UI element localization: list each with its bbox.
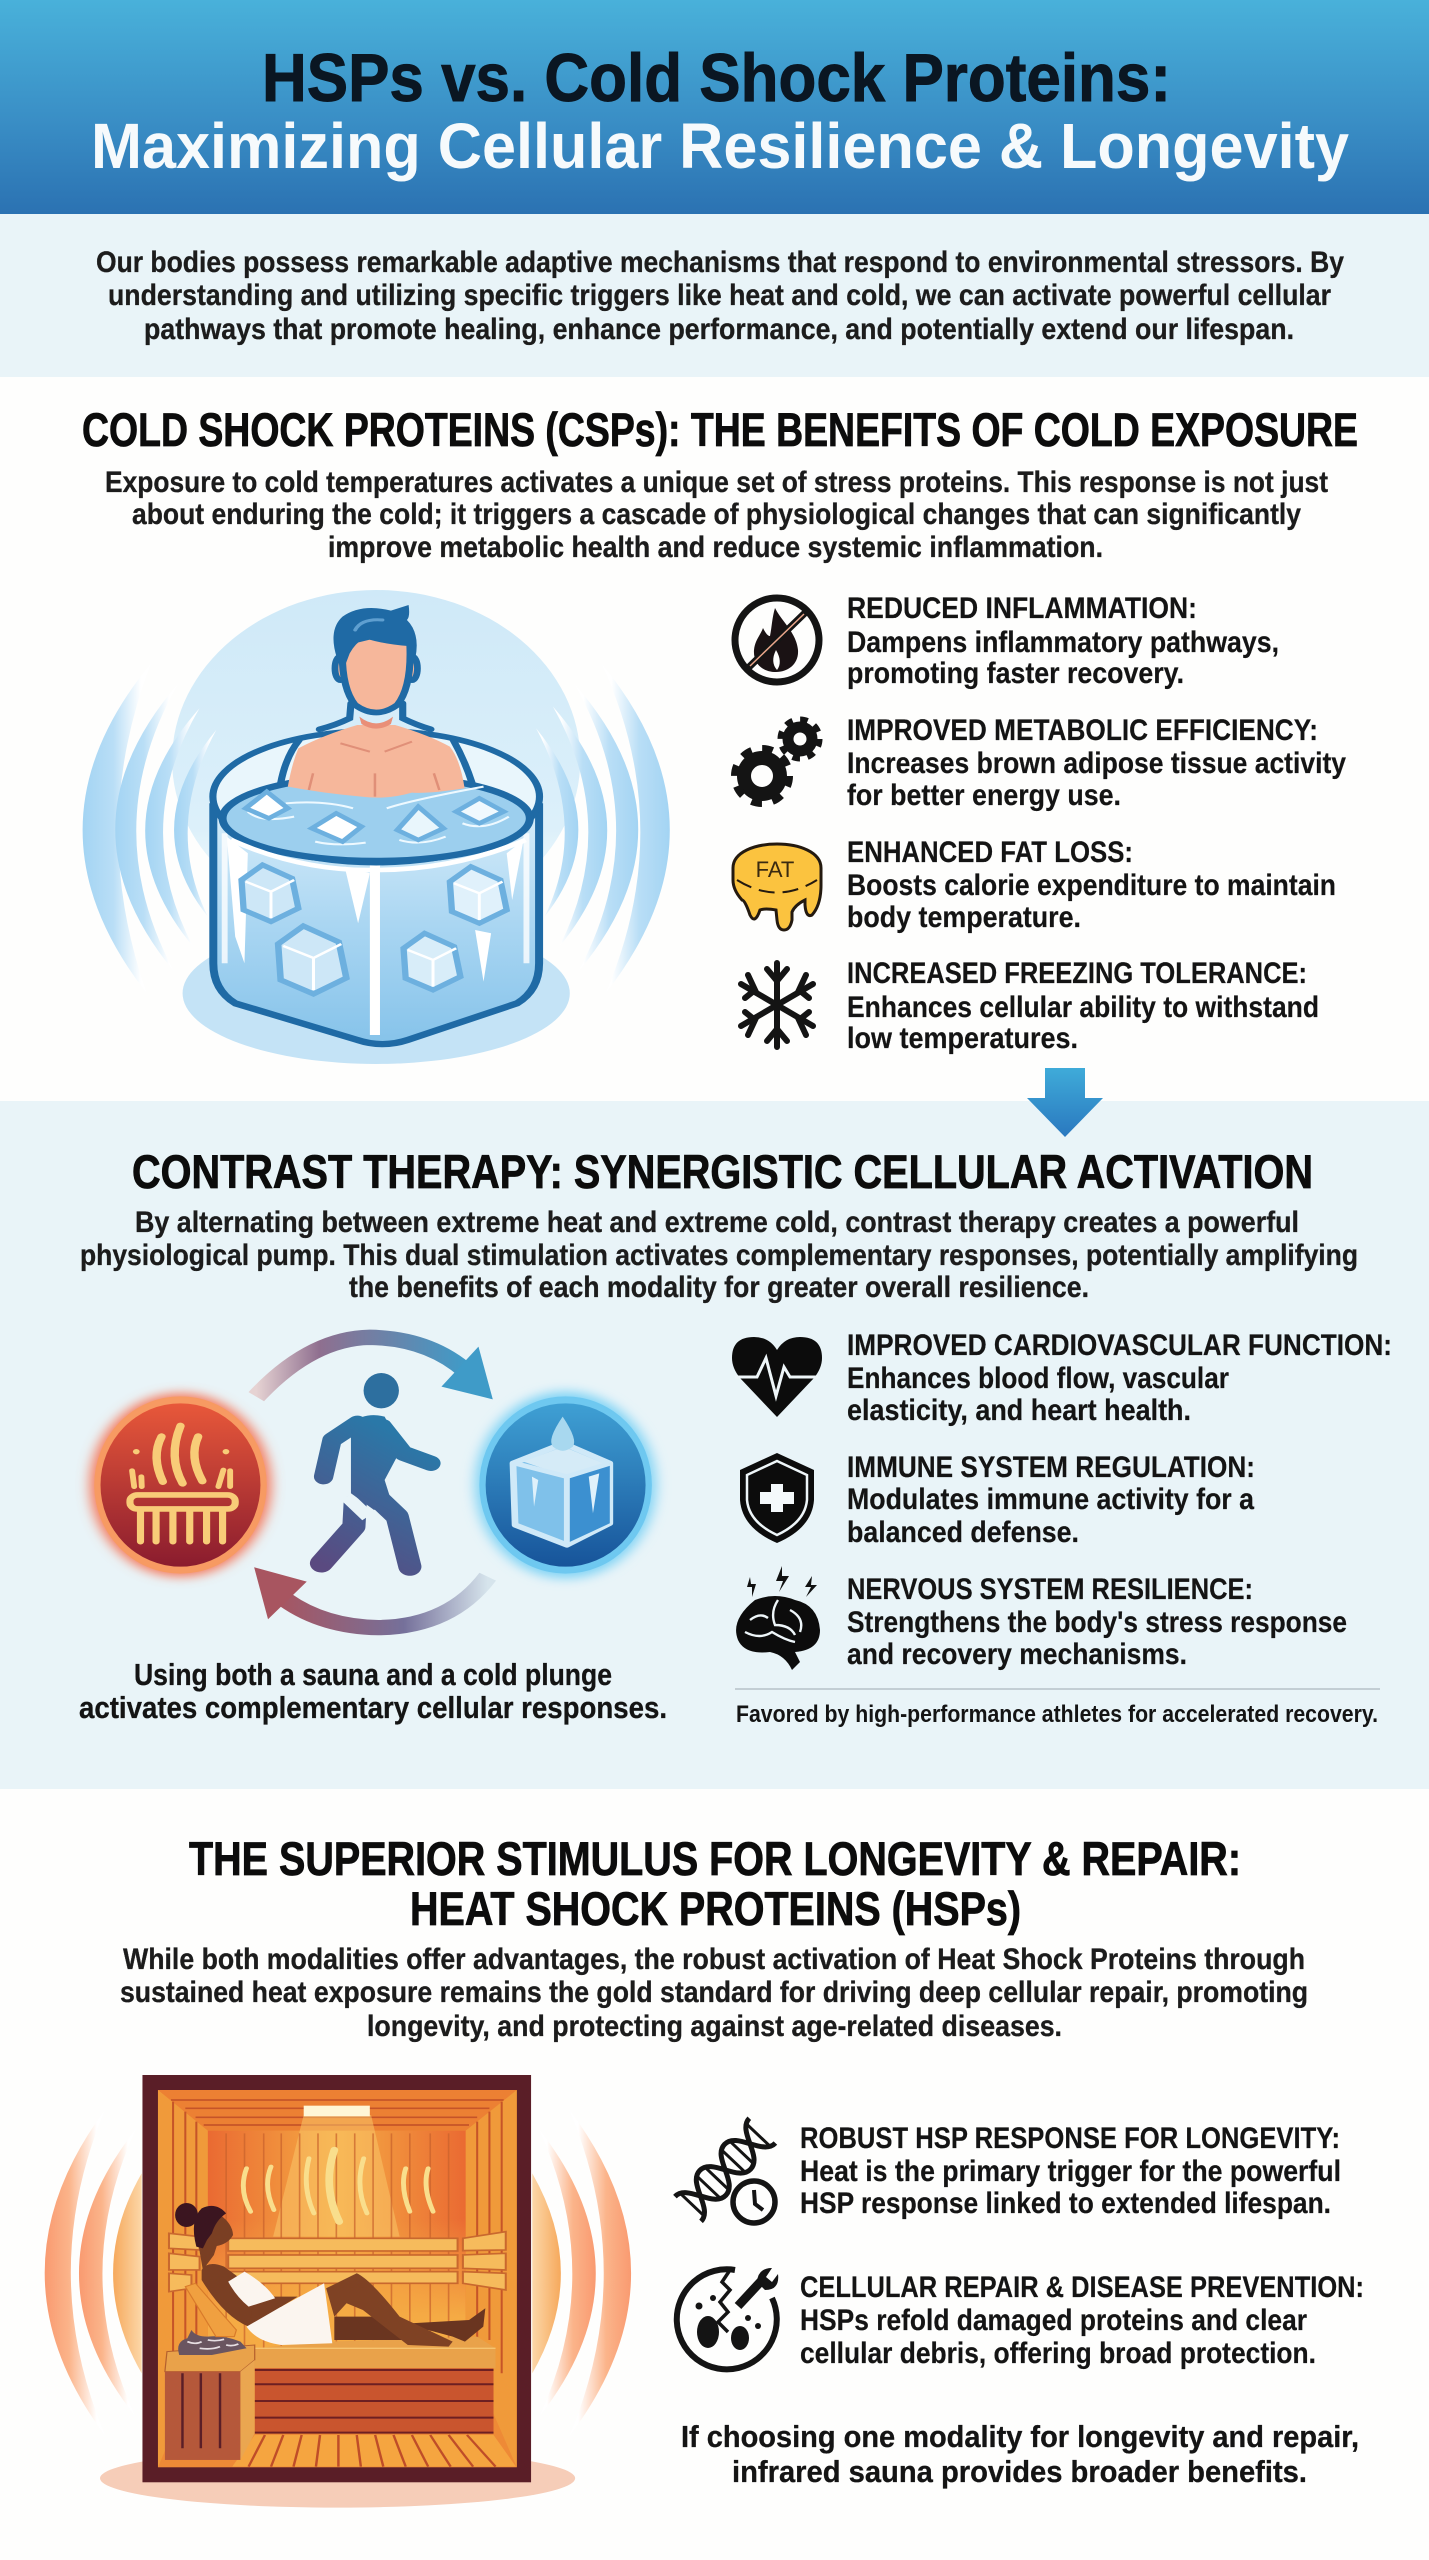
icon: brain with bolts [736,1566,820,1670]
benefit: fat loss: body temperature. [847,901,1081,934]
conclusion: If choosing one modality for longevity and repair, [681,2419,1359,2454]
benefit: immune: IMMUNE SYSTEM REGULATION: [847,1451,1255,1484]
benefit: immune: balanced defense. [847,1516,1079,1549]
benefit: fat loss [847,836,1336,934]
illustration: man in ice bath [83,590,670,1064]
icon: no inflammation [735,598,819,682]
list: cold benefits [733,592,1346,1055]
text block: HSP intro: longevity, and protecting against age-related diseases. [367,2010,1062,2043]
benefit: freezing tolerance: INCREASED FREEZING TOLERANCE: [847,957,1307,990]
benefit: reduced inflammation: REDUCED INFLAMMATION: [847,592,1197,625]
icon: melting fat: FAT [756,857,794,882]
text block: contrast intro: the benefits of each modality for greater overall resilience. [349,1271,1089,1304]
icon: gears [735,720,819,803]
benefit: cardiovascular [847,1329,1392,1427]
heading: superior stimulus: HEAT SHOCK PROTEINS (HSPs) [410,1882,1021,1935]
benefit: cellular repair: HSPs refold damaged proteins and clear [800,2304,1307,2337]
list: HSP benefits [675,2118,1364,2489]
conclusion: infrared sauna provides broader benefits. [732,2454,1307,2489]
benefit: immune [847,1451,1255,1549]
title line 1: HSPs vs. Cold Shock Proteins: [262,40,1171,116]
text block: HSP intro [120,1943,1308,2043]
benefit: nervous system: Strengthens the body's stress response [847,1606,1347,1639]
text block: cold intro: about enduring the cold; it triggers a cascade of physiological changes that can significantly [132,498,1301,531]
benefit: cellular repair [800,2271,1364,2370]
benefit: immune: Modulates immune activity for a [847,1483,1254,1516]
heading: superior stimulus: THE SUPERIOR STIMULUS FOR LONGEVITY & REPAIR: [189,1832,1241,1885]
benefit: freezing tolerance: Enhances cellular ability to withstand [847,991,1319,1024]
panel: introduction: pathways that promote healing, enhance performance, and potentially extend our lifespan. [144,313,1294,346]
title line 2: Maximizing Cellular Resilience & Longevity [91,110,1349,182]
icon: shield with cross [740,1453,814,1543]
icon: melting fat [733,844,821,930]
text block: contrast intro: By alternating between extreme heat and extreme cold, contrast therapy creates a powerful [135,1206,1299,1239]
text block: HSP intro: sustained heat exposure remains the gold standard for driving deep cellular repair, promoting [120,1976,1308,2009]
benefit: robust HSP response: ROBUST HSP RESPONSE FOR LONGEVITY: [800,2122,1340,2155]
icon: cell repair [677,2268,778,2369]
icon: DNA and clock [675,2118,775,2223]
caption: sauna and cold plunge: Using both a sauna and a cold plunge [134,1657,612,1692]
benefit: freezing tolerance [847,957,1319,1055]
text block: cold intro: improve metabolic health and reduce systemic inflammation. [328,531,1103,564]
caption: sauna and cold plunge [79,1657,667,1725]
benefit: nervous system: NERVOUS SYSTEM RESILIENCE: [847,1573,1253,1606]
heading: superior stimulus [189,1832,1241,1935]
caption: sauna and cold plunge: activates complementary cellular responses. [79,1690,667,1725]
panel: contrast therapy background [0,1101,1429,1789]
diagram: sauna and cold plunge cycle [90,1337,656,1628]
text block: HSP intro: While both modalities offer advantages, the robust activation of Heat Shock Proteins through [123,1943,1305,1976]
benefit: reduced inflammation: promoting faster recovery. [847,657,1184,690]
benefit: robust HSP response: Heat is the primary trigger for the powerful [800,2155,1341,2188]
benefit: robust HSP response [800,2122,1341,2220]
illustration: woman in infrared sauna [45,2075,631,2508]
benefit: fat loss: Boosts calorie expenditure to maintain [847,869,1336,902]
benefit: freezing tolerance: low temperatures. [847,1022,1078,1055]
text block: contrast intro [80,1206,1358,1304]
benefit: metabolic efficiency: Increases brown adipose tissue activity [847,747,1346,780]
benefit: nervous system: and recovery mechanisms. [847,1638,1187,1671]
benefit: metabolic efficiency: for better energy use. [847,779,1121,812]
benefit: fat loss: ENHANCED FAT LOSS: [847,836,1133,869]
benefit: robust HSP response: HSP response linked to extended lifespan. [800,2187,1331,2220]
icon: heart with pulse [732,1337,822,1417]
panel: header [0,0,1429,214]
benefit: nervous system [847,1573,1347,1671]
benefit: metabolic efficiency: IMPROVED METABOLIC EFFICIENCY: [847,714,1318,747]
list: contrast benefits [732,1329,1392,1728]
benefit: reduced inflammation [847,592,1279,690]
arrow: down to contrast therapy [1027,1068,1103,1137]
benefit: cellular repair: cellular debris, offering broad protection. [800,2337,1316,2370]
benefit: cardiovascular: elasticity, and heart health. [847,1394,1191,1427]
benefit: cardiovascular: Enhances blood flow, vascular [847,1362,1229,1395]
text block: cold intro [105,466,1328,564]
benefit: reduced inflammation: Dampens inflammatory pathways, [847,626,1279,659]
conclusion [681,2419,1359,2489]
benefit: metabolic efficiency [847,714,1346,812]
icon: snowflake [741,963,813,1047]
panel: introduction [0,214,1429,377]
